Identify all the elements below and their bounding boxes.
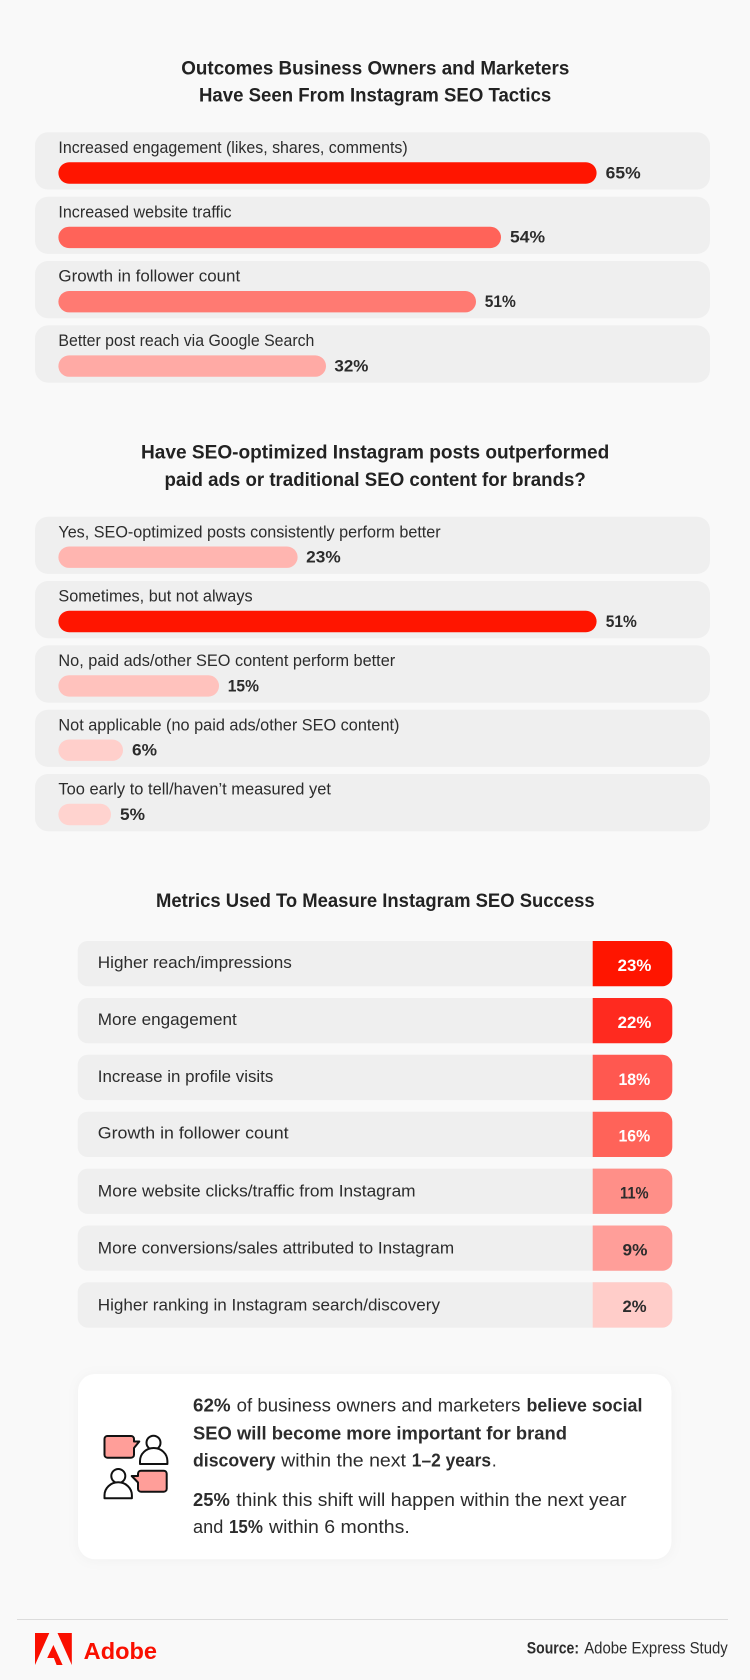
logo: Adobe — [35, 1633, 157, 1665]
row: yes consistently better 23% — [35, 517, 710, 574]
text: 25% within next year and 15% within 6 months: 15% — [229, 1517, 263, 1537]
row: more engagement 22%: 22% — [618, 1014, 652, 1032]
row: too early to tell 5%: Too early to tell/haven’t measured yet — [58, 780, 331, 799]
row: yes consistently better 23%: Yes, SEO-optimized posts consistently perform better — [58, 522, 441, 541]
source note — [527, 1639, 728, 1657]
row: sometimes 51%: 51% — [606, 613, 637, 631]
row: sometimes 51%: Sometimes, but not always — [58, 587, 253, 606]
text: 25% within next year and 15% within 6 months — [193, 1490, 626, 1537]
row: higher reach 23%: Higher reach/impressions — [98, 953, 292, 972]
row: website clicks 11%: 11% — [620, 1184, 649, 1202]
row: not applicable 6% — [35, 710, 710, 767]
row: profile visits 18%: Increase in profile visits — [98, 1067, 273, 1086]
row: too early to tell 5%: 5% — [120, 806, 145, 824]
text: 62% believe social SEO will become more important: 62% — [193, 1396, 231, 1416]
row: not applicable 6%: Not applicable (no paid ads/other SEO content) — [58, 715, 400, 734]
text: 25% within next year and 15% within 6 months: within 6 months. — [268, 1517, 410, 1537]
row: search ranking 2%: Higher ranking in Instagram search/discovery — [98, 1295, 440, 1314]
callout: social SEO importance — [78, 1374, 671, 1559]
heading: metrics: Metrics Used To Measure Instagram SEO Success — [156, 890, 595, 912]
row: higher reach 23% — [78, 941, 672, 986]
row: growth in follower count 51%: 51% — [485, 293, 516, 311]
text: 62% believe social SEO will become more important: of business owners and marketers — [237, 1396, 520, 1416]
row: better post reach via Google Search 32% — [35, 325, 710, 383]
row: sometimes 51% — [35, 581, 710, 638]
heading: outperformed question: Have SEO-optimized Instagram posts outperformed — [141, 441, 609, 463]
row: conversions 9%: 9% — [622, 1241, 648, 1259]
row: increased engagement 65% — [35, 132, 710, 190]
row: follower count 16%: 16% — [618, 1128, 651, 1146]
text: 25% within next year and 15% within 6 months: and — [193, 1517, 223, 1537]
row: increased website traffic 54% — [35, 197, 710, 254]
text: 62% believe social SEO will become more important: 1–2 years — [412, 1451, 491, 1471]
row: more engagement 22% — [78, 998, 672, 1043]
row: increased engagement 65%: 65% — [606, 164, 641, 182]
row: higher reach 23%: 23% — [618, 957, 652, 975]
row: no, paid ads better 15%: 15% — [228, 677, 259, 695]
section: metrics used to measure success — [78, 890, 672, 1328]
text: 25% within next year and 15% within 6 months: think this shift will happen within the next year — [236, 1490, 627, 1510]
row: more engagement 22%: More engagement — [98, 1010, 237, 1029]
row: not applicable 6%: 6% — [132, 742, 157, 760]
text: 25% within next year and 15% within 6 months: 25% — [193, 1490, 230, 1510]
text: 62% believe social SEO will become more important — [193, 1396, 642, 1471]
text: 62% believe social SEO will become more important: . — [492, 1451, 497, 1471]
heading: outcomes: Have Seen From Instagram SEO Tactics — [199, 84, 551, 106]
row: profile visits 18% — [78, 1055, 672, 1100]
row: follower count 16%: Growth in follower count — [98, 1124, 289, 1143]
icon: two people with speech bubbles — [104, 1436, 167, 1498]
row: website clicks 11%: More website clicks/traffic from Instagram — [98, 1182, 416, 1201]
row: profile visits 18%: 18% — [618, 1071, 651, 1089]
row: growth in follower count 51%: Growth in follower count — [58, 267, 240, 286]
row: better post reach via Google Search 32%: 32% — [334, 357, 369, 375]
section: SEO posts versus paid ads — [35, 441, 710, 831]
text: 62% believe social SEO will become more important: SEO will become more important for brand — [193, 1423, 567, 1443]
text: 62% believe social SEO will become more important: within the next — [280, 1451, 406, 1471]
row: search ranking 2%: 2% — [622, 1298, 647, 1316]
row: yes consistently better 23%: 23% — [306, 549, 341, 567]
row: no, paid ads better 15% — [35, 645, 710, 703]
heading: outperformed question: paid ads or traditional SEO content for brands? — [164, 469, 586, 491]
row: no, paid ads better 15%: No, paid ads/other SEO content perform better — [58, 651, 396, 670]
row: better post reach via Google Search 32%: Better post reach via Google Search — [58, 331, 314, 350]
text: 62% believe social SEO will become more important: discovery — [193, 1451, 276, 1471]
row: search ranking 2% — [78, 1282, 672, 1328]
heading: outperformed question — [141, 441, 609, 491]
row: increased website traffic 54%: 54% — [510, 229, 545, 247]
source note: Source: — [527, 1639, 579, 1657]
row: website clicks 11% — [78, 1169, 672, 1214]
row: conversions 9% — [78, 1226, 672, 1271]
footer — [35, 1633, 728, 1665]
section: outcomes from Instagram SEO tactics — [35, 57, 710, 383]
row: growth in follower count 51% — [35, 261, 710, 318]
heading: outcomes: Outcomes Business Owners and Marketers — [181, 57, 569, 79]
logo: Adobe: Adobe — [84, 1638, 157, 1664]
row: conversions 9%: More conversions/sales attributed to Instagram — [98, 1238, 454, 1258]
heading: outcomes — [181, 57, 569, 106]
row: increased engagement 65%: Increased engagement (likes, shares, comments) — [58, 138, 408, 157]
text: 62% believe social SEO will become more important: believe social — [526, 1396, 642, 1416]
row: too early to tell 5% — [35, 774, 710, 831]
row: follower count 16% — [78, 1112, 672, 1157]
source note: Adobe Express Study — [584, 1639, 728, 1657]
row: increased website traffic 54%: Increased website traffic — [58, 202, 232, 221]
